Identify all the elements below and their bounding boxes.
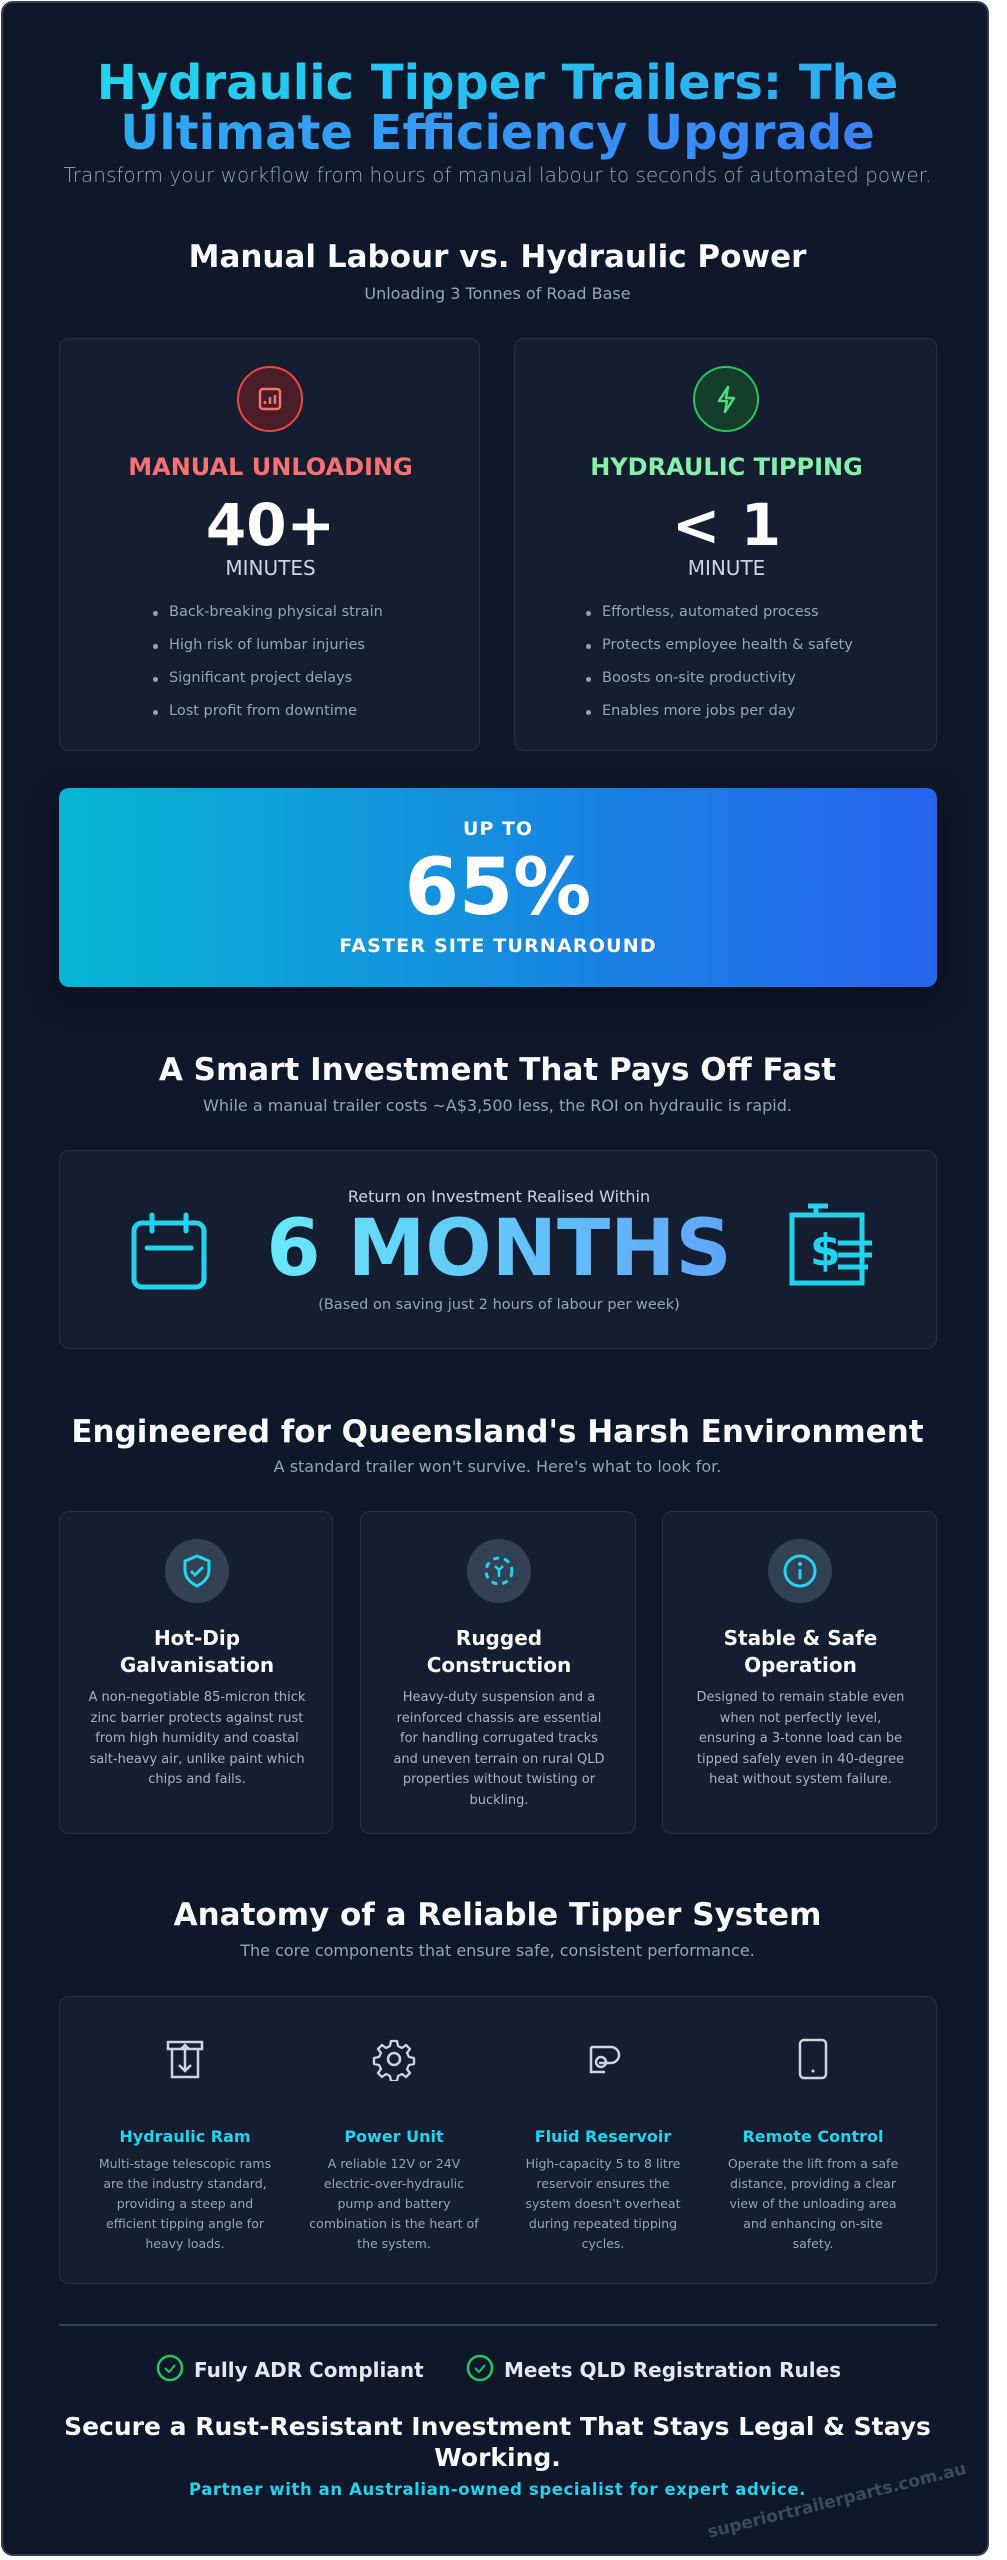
component: ram: Multi-stage telescopic rams are the industry standard, providing a steep and efficient tipping angle for heavy loads. (99, 2156, 271, 2251)
icon: money (790, 1204, 872, 1286)
stat: 40+ (206, 491, 335, 559)
heading: environment: Engineered for Queensland's Harsh Environment (71, 1414, 924, 1450)
component: remote (728, 2038, 898, 2251)
panel: anatomy components (59, 1996, 937, 2284)
panel: rugged (360, 1511, 636, 1834)
list: High risk of lumbar injuries (169, 637, 365, 653)
heading: MANUAL UNLOADING (128, 453, 413, 481)
icon: shield (165, 1539, 229, 1603)
banner: 65% (59, 788, 937, 987)
component: power unit (309, 2040, 479, 2251)
component: remote: Operate the lift from a safe distance, providing a clear view of the unloading area and enhancing on-site safety. (728, 2156, 898, 2251)
icon: money: $ (810, 1225, 841, 1276)
title: Hydraulic Tipper Trailers: The (97, 55, 898, 111)
panel: stable: Designed to remain stable even when not perfectly level, ensuring a 3-tonne load can be tipped safely even in 40-degree heat without system failure. (697, 1690, 904, 1787)
heading: anatomy: Anatomy of a Reliable Tipper System (174, 1897, 821, 1933)
list: Enables more jobs per day (602, 703, 795, 719)
banner: 65%: UP TO (463, 818, 533, 840)
heading: investment: A Smart Investment That Pays Off Fast (159, 1052, 836, 1088)
closing heading: Working. (434, 2443, 561, 2472)
panel: ROI (59, 1150, 937, 1349)
component: remote: Remote Control (742, 2127, 884, 2146)
badge: ADR: Fully ADR Compliant (194, 2358, 424, 2382)
list: Lost profit from downtime (169, 703, 357, 719)
panel: stable (662, 1511, 937, 1834)
banner: 65%: 65% (405, 843, 591, 933)
panel: rugged: Heavy-duty suspension and a reinforced chassis are essential for handling corrugated tracks and uneven terrain on rural QLD properties without twisting or buckling. (393, 1690, 605, 1808)
panel: rugged: Rugged (456, 1626, 542, 1650)
list: Boosts on-site productivity (602, 670, 796, 686)
banner: 65%: FASTER SITE TURNAROUND (339, 935, 657, 957)
title (97, 55, 898, 161)
unit: MINUTE (688, 556, 765, 580)
list (153, 604, 383, 719)
panel: galvanisation (59, 1511, 333, 1834)
unit: MINUTES (225, 556, 316, 580)
heading: manual vs hydraulic: Manual Labour vs. Hydraulic Power (189, 239, 806, 275)
icon: chart (237, 366, 303, 432)
subtitle: Transform your workflow from hours of manual labour to seconds of automated power. (64, 163, 931, 187)
subheading: While a manual trailer costs ~A$3,500 less, the ROI on hydraulic is rapid. (203, 1096, 792, 1115)
closing tagline: Partner with an Australian-owned specialist for expert advice. (189, 2480, 806, 2499)
panel: galvanisation: A non-negotiable 85-micron thick zinc barrier protects against rust from high humidity and coastal salt-heavy air, unlike paint which chips and fails. (89, 1690, 305, 1787)
component: ram (99, 2040, 271, 2251)
closing heading: Secure a Rust-Resistant Investment That Stays Legal & Stays (64, 2412, 931, 2441)
component: power unit: A reliable 12V or 24V electric-over-hydraulic pump and battery combination is the heart of the system. (309, 2156, 479, 2251)
panel: galvanisation: Galvanisation (120, 1653, 274, 1677)
panel: rugged: Construction (427, 1653, 571, 1677)
badge: QLD: Meets QLD Registration Rules (504, 2358, 841, 2382)
component: power unit: Power Unit (344, 2127, 444, 2146)
closing heading (64, 2412, 931, 2472)
panel: galvanisation: Hot-Dip (154, 1626, 240, 1650)
icon: info (768, 1539, 832, 1603)
component: reservoir (525, 2046, 680, 2251)
list: Protects employee health & safety (602, 637, 853, 653)
stat: < 1 (672, 491, 781, 559)
panel: stable: Operation (744, 1653, 857, 1677)
subheading: Unloading 3 Tonnes of Road Base (364, 284, 631, 303)
list: Back-breaking physical strain (169, 604, 383, 620)
panel: manual unloading (59, 338, 480, 751)
icon: dashed circle (467, 1539, 531, 1603)
list: Effortless, automated process (602, 604, 819, 620)
note: (Based on saving just 2 hours of labour per week) (318, 1297, 680, 1313)
compliance badges (156, 2354, 841, 2382)
list: Significant project delays (169, 670, 352, 686)
icon: bolt (693, 366, 759, 432)
component: reservoir: High-capacity 5 to 8 litre reservoir ensures the system doesn't overheat during repeated tipping cycles. (525, 2156, 680, 2251)
panel: hydraulic tipping (514, 338, 937, 751)
heading: HYDRAULIC TIPPING (590, 453, 863, 481)
title: Ultimate Efficiency Upgrade (120, 105, 875, 161)
watermark: superiortrailerparts.com.au (706, 2459, 969, 2543)
icon: calendar (132, 1212, 206, 1290)
component: reservoir: Fluid Reservoir (535, 2127, 671, 2146)
panel: stable: Stable & Safe (724, 1626, 877, 1650)
component: ram: Hydraulic Ram (119, 2127, 251, 2146)
label: Return on Investment Realised Within (348, 1187, 650, 1206)
subheading: A standard trailer won't survive. Here's what to look for. (274, 1457, 721, 1476)
subheading: The core components that ensure safe, consistent performance. (240, 1941, 755, 1960)
stat: 6 months: 6 MONTHS (266, 1204, 732, 1294)
list (586, 604, 853, 719)
